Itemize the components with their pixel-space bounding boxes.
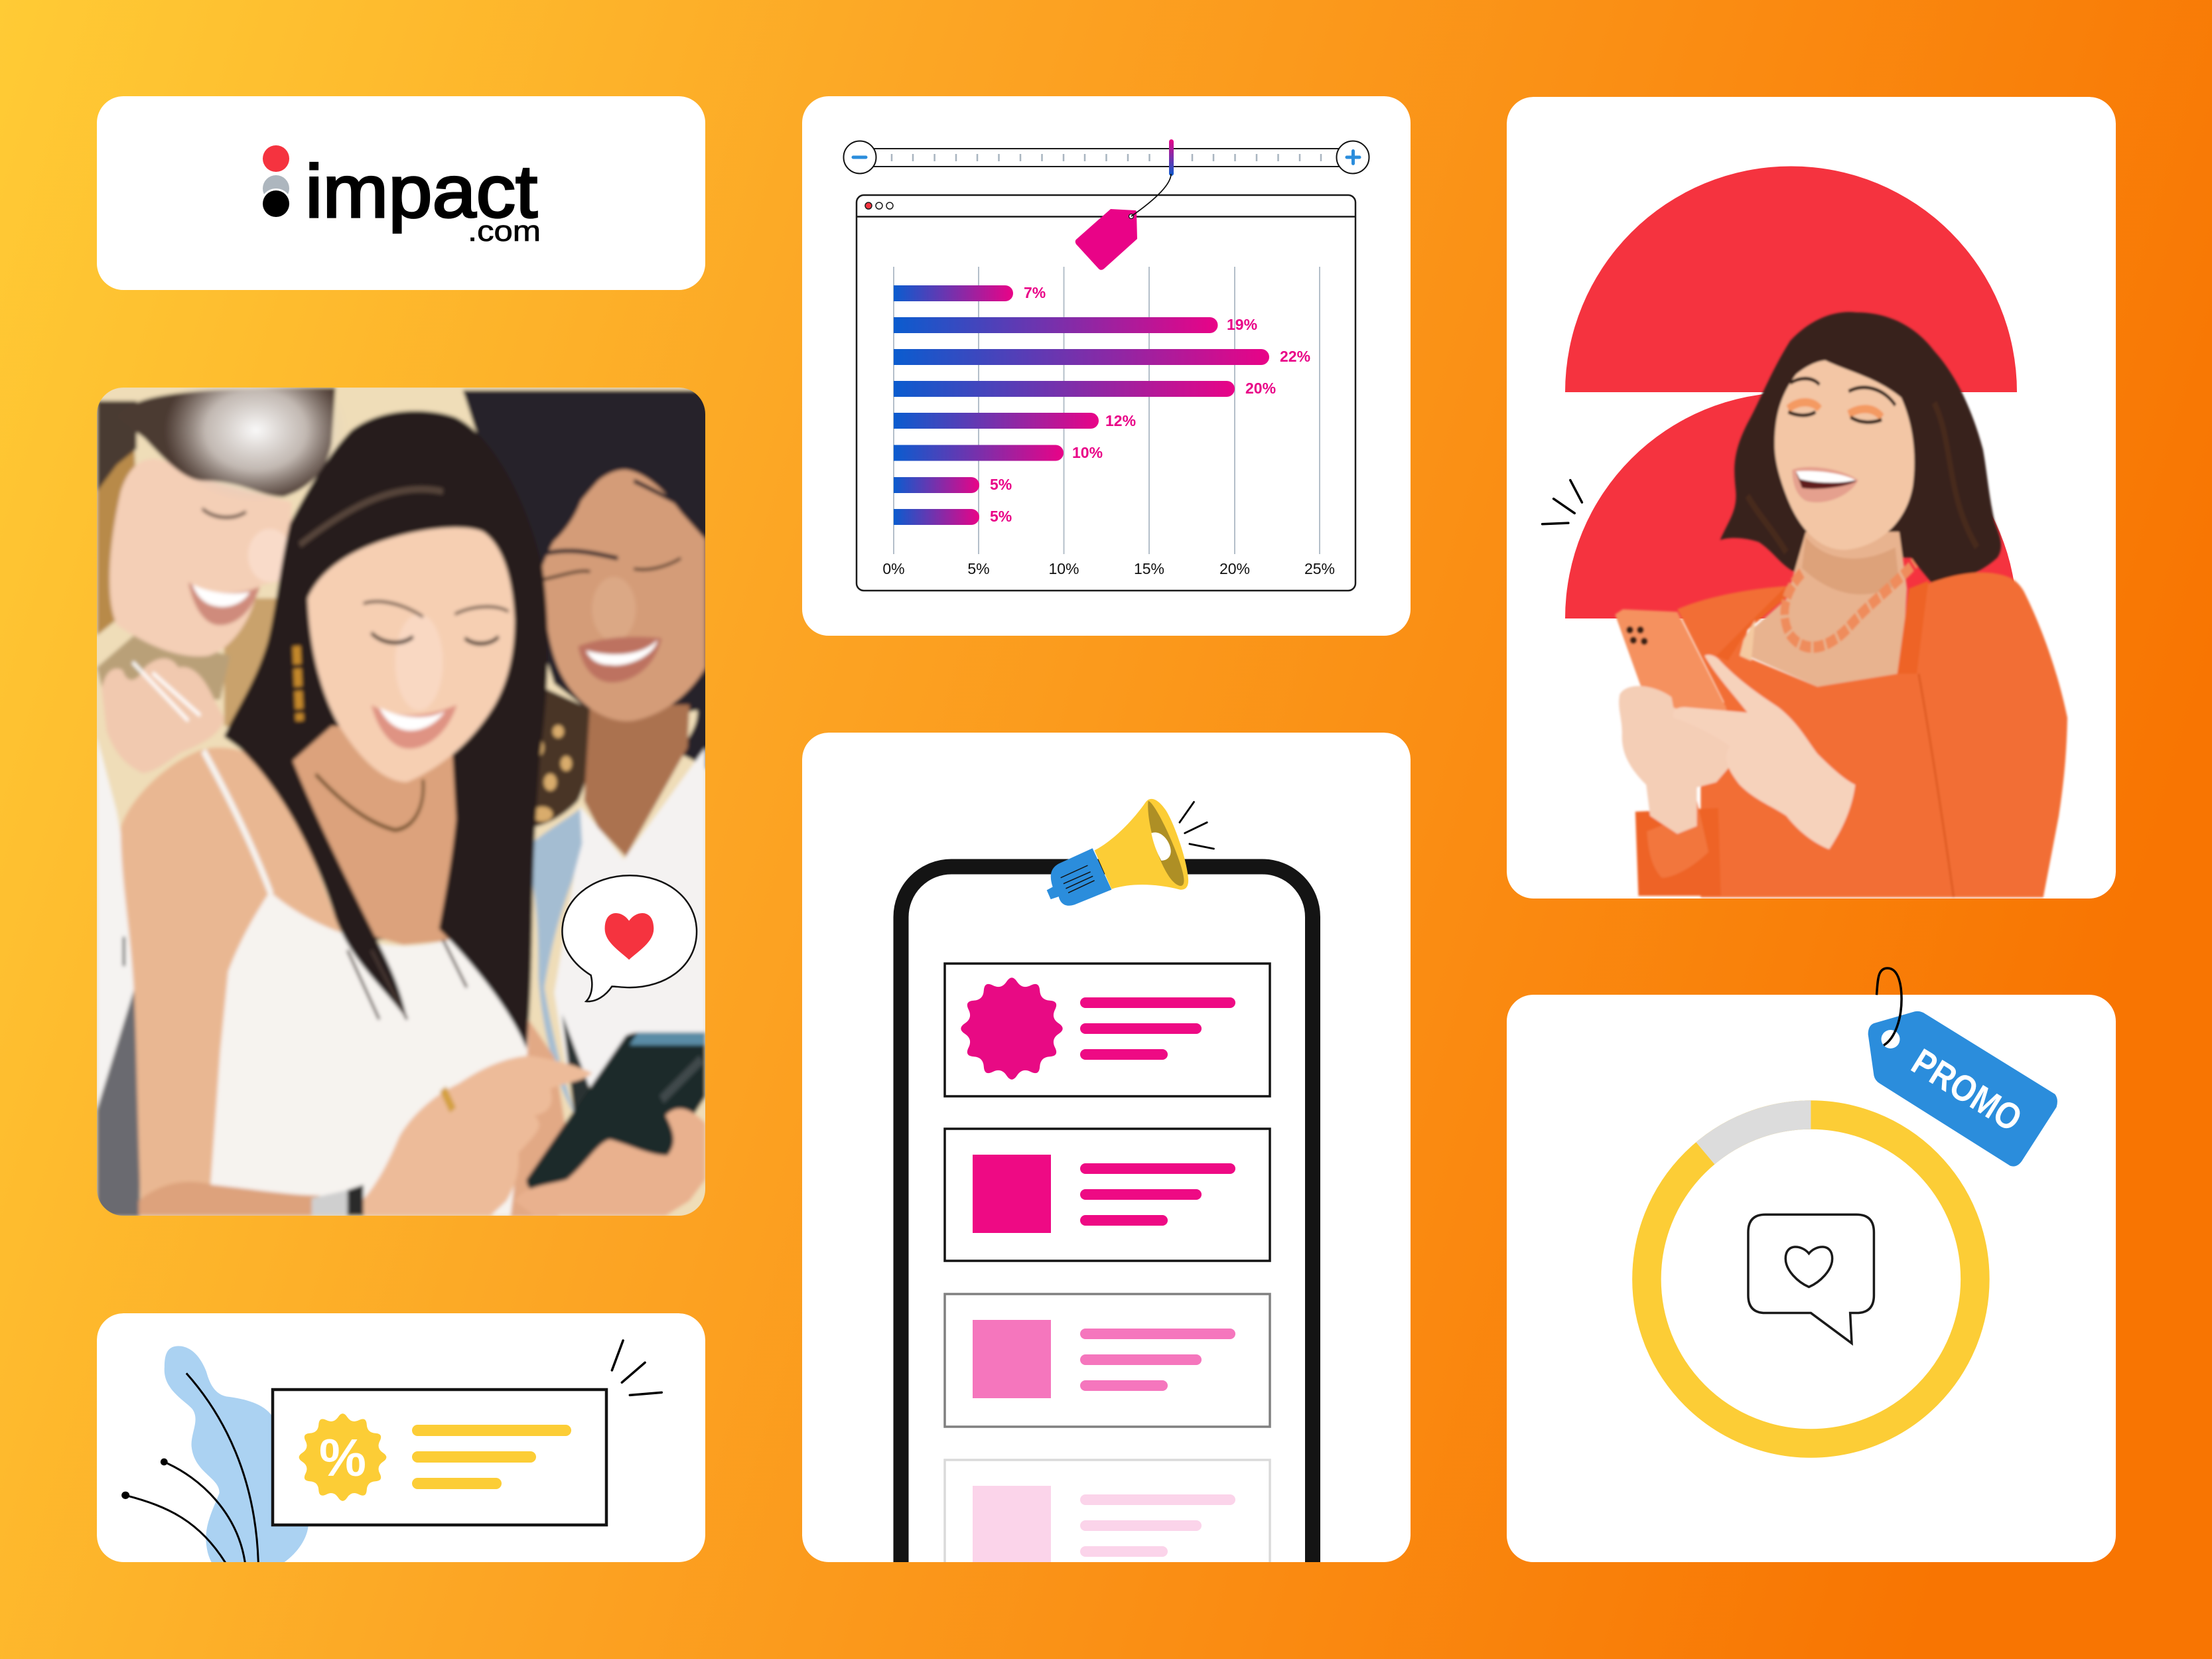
plant illustration <box>121 1346 309 1564</box>
donut chart <box>1647 1115 1975 1443</box>
woman center arm right <box>510 1019 566 1217</box>
speech bubble <box>562 875 697 1001</box>
bar chart: 20% <box>1219 560 1250 577</box>
bar chart: 19% <box>1227 316 1257 333</box>
mouth <box>1792 467 1858 502</box>
logo wordmark: impact <box>305 150 537 233</box>
discount badge <box>299 1413 386 1501</box>
bar chart: 15% <box>1134 560 1164 577</box>
bar chart: 22% <box>1280 348 1310 365</box>
bar chart: 10% <box>1048 560 1079 577</box>
panel: phone feed <box>802 733 1411 1593</box>
burst lines <box>1543 480 1582 524</box>
bar chart: 20% <box>1245 380 1276 397</box>
eye shadow <box>1788 402 1882 417</box>
woman center hand <box>348 1056 592 1216</box>
feed card 1 <box>945 964 1270 1096</box>
woman center forearm <box>139 1182 320 1216</box>
panel: logo <box>97 96 705 290</box>
eyes <box>1788 412 1882 422</box>
logo mark: three dots <box>261 145 291 219</box>
price tag icon <box>1075 174 1171 270</box>
woman right face <box>542 470 705 721</box>
watch <box>312 1190 348 1216</box>
neck and chest <box>1748 532 1907 687</box>
panel: photo of three friends <box>93 358 717 1221</box>
bar chart: 0% <box>882 560 905 577</box>
price slider <box>844 139 1369 176</box>
icon: heart <box>605 913 654 960</box>
woman right hair <box>463 390 713 774</box>
woman right denim jacket <box>525 809 582 1116</box>
promo tag <box>1868 1011 2057 1167</box>
photo background <box>93 385 717 1221</box>
panel: donut card <box>1507 968 2116 1562</box>
phone <box>526 1033 705 1190</box>
bar chart: 5% <box>967 560 990 577</box>
woman left hand <box>102 658 224 773</box>
woman left face <box>109 459 293 656</box>
red semicircle bottom <box>1565 392 2017 618</box>
feed card 2 <box>945 1129 1270 1261</box>
woman center top <box>208 891 562 1216</box>
browser window <box>857 195 1355 591</box>
earring <box>297 646 300 721</box>
left hand <box>1619 686 1748 834</box>
discount badge: % <box>319 1428 366 1487</box>
woman left blonde hair <box>97 449 137 636</box>
feed card 4 <box>945 1460 1270 1593</box>
tag string <box>1877 968 1901 1045</box>
woman center hair <box>224 411 548 1046</box>
woman left hair with sun bloom <box>117 388 336 497</box>
bar chart: 7% <box>1024 284 1046 301</box>
photo of woman <box>1615 312 2067 897</box>
bar chart: 25% <box>1304 560 1335 577</box>
sunlit curls <box>531 687 593 829</box>
bar chart <box>882 267 1335 577</box>
woman right shirt <box>554 747 705 1100</box>
orange top <box>1677 573 2067 897</box>
phone <box>1615 609 1736 772</box>
right hand <box>1673 655 1855 849</box>
offer text lines <box>412 1425 571 1489</box>
burst lines <box>612 1340 661 1395</box>
woman center face <box>308 528 514 782</box>
feed card 3 <box>945 1294 1270 1427</box>
cuff <box>1635 808 1721 896</box>
eyebrows <box>1790 378 1896 405</box>
bar chart: 12% <box>1105 412 1136 429</box>
necklace <box>1785 563 1915 647</box>
woman right curls on forehead <box>552 467 705 541</box>
red semicircle top <box>1565 167 2017 392</box>
woman left shoulder background <box>97 631 230 699</box>
logo suffix: .com <box>468 215 541 248</box>
bar chart: 5% <box>990 508 1012 525</box>
phone hand <box>514 1109 705 1216</box>
right hair band <box>439 598 544 1048</box>
face <box>1775 360 1914 550</box>
offer box <box>273 1390 606 1525</box>
panel: woman with phone <box>1507 97 2116 899</box>
woman center shoulder and arm <box>121 748 348 1201</box>
bar chart: 10% <box>1072 444 1103 461</box>
phone frame <box>901 867 1312 1579</box>
promo tag: PROMO <box>1905 1041 2030 1139</box>
woman right neck <box>584 705 689 857</box>
bar chart: 5% <box>990 476 1012 493</box>
left hair band <box>224 729 407 1019</box>
panel: price chart <box>802 96 1411 636</box>
hair <box>1720 312 2001 586</box>
necklace <box>316 774 423 830</box>
woman left jacket <box>97 737 135 1110</box>
icon: speech bubble with heart <box>1748 1214 1874 1343</box>
woman center chest <box>284 726 463 945</box>
panel: promo card <box>97 1313 705 1564</box>
icon: megaphone <box>1047 799 1213 906</box>
